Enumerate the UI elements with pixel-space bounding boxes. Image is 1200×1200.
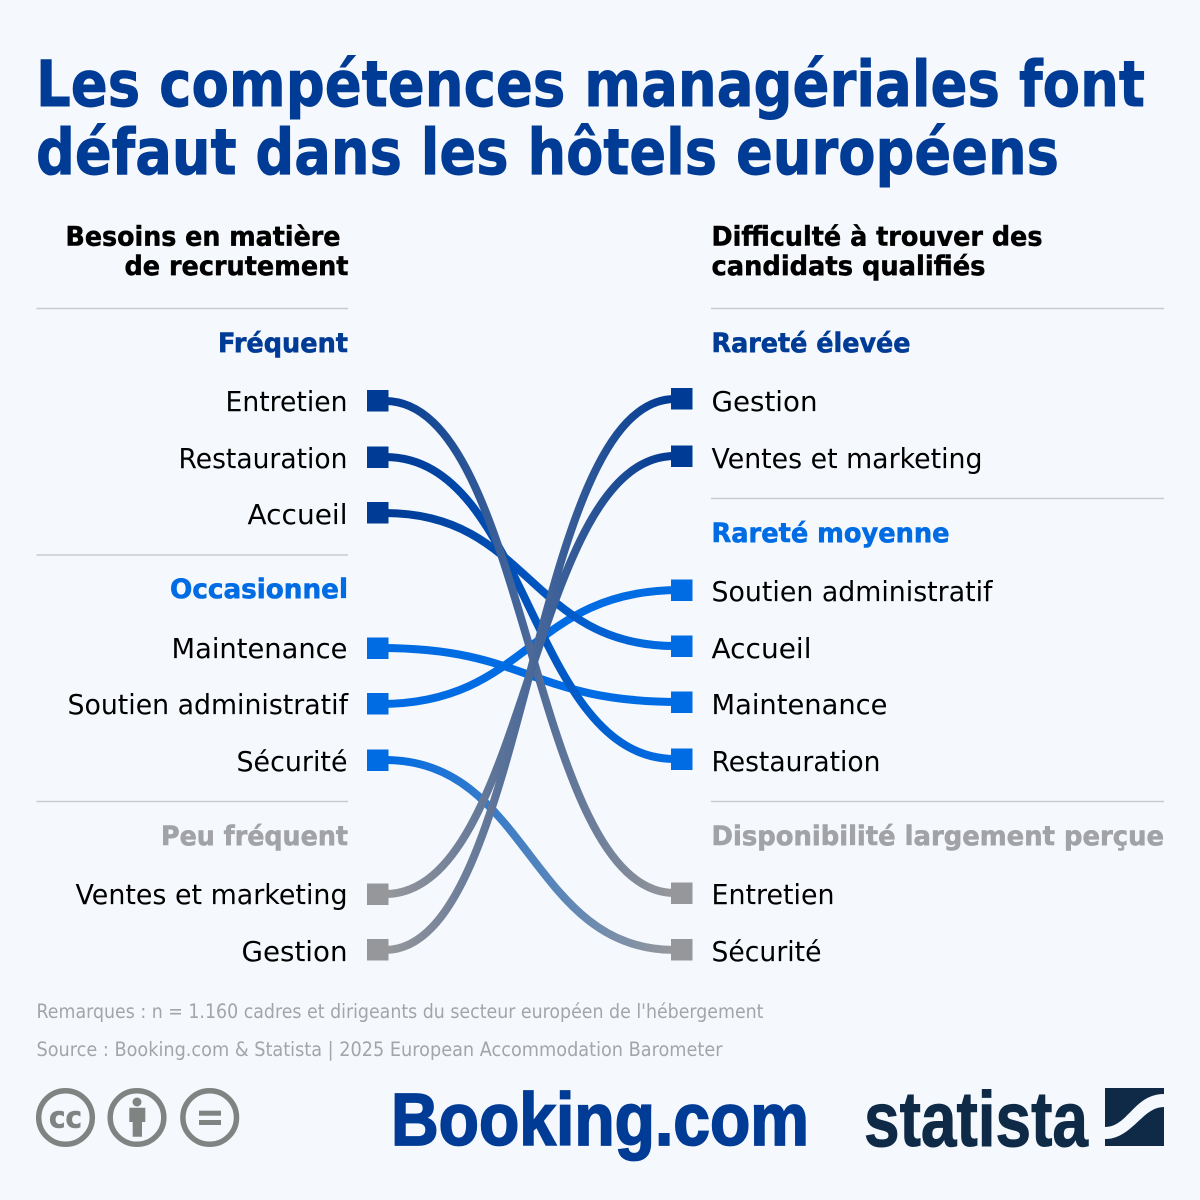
category: Occasionnel: Occasionnel: [170, 574, 348, 605]
label: Entretien: Entretien: [712, 879, 834, 911]
category: Rareté moyenne: Rareté moyenne: [712, 518, 950, 549]
right endpoint markers: [671, 388, 692, 960]
label: Gestion: Gestion: [712, 386, 818, 418]
label: Sécurité: Sécurité: [236, 746, 348, 778]
right column heading: candidats qualifiés: [712, 251, 986, 282]
panel: left column labels: [68, 328, 349, 968]
connector: Soutien administratif: [380, 590, 680, 704]
icon: creative commons: cc: [49, 1100, 82, 1134]
title: défaut dans les hôtels européens: [36, 116, 1059, 189]
left column heading: de recrutement: [124, 251, 349, 282]
left column heading: Besoins en matière: [66, 222, 340, 252]
title: [36, 48, 1145, 189]
label: Entretien: Entretien: [226, 386, 348, 418]
right column heading: [712, 222, 1042, 282]
right column heading: Difficulté à trouver des: [712, 222, 1042, 252]
logo: Statista wordmark: statista: [864, 1075, 1088, 1163]
label: Accueil: Accueil: [712, 633, 812, 665]
icon: creative commons: [39, 1091, 92, 1144]
connector: Gestion: [385, 399, 675, 950]
category: Rareté élevée: Rareté élevée: [712, 328, 910, 359]
label: Restauration: Restauration: [178, 443, 348, 475]
icon: attribution: [110, 1091, 164, 1144]
label: Restauration: Restauration: [712, 746, 880, 778]
label: Ventes et marketing: Ventes et marketing: [76, 879, 348, 911]
label: Sécurité: Sécurité: [712, 936, 822, 968]
connector: Sécurité: [385, 760, 675, 950]
label: Ventes et marketing: Ventes et marketing: [712, 443, 982, 475]
label: Maintenance: Maintenance: [172, 633, 348, 665]
left column heading: [66, 222, 349, 282]
category: Disponibilité largement perçue: Disponibilité largement perçue: [712, 821, 1164, 852]
connector: Accueil: [385, 513, 675, 646]
icon: no derivatives: [183, 1091, 236, 1144]
slope chart connectors: [380, 399, 680, 950]
connector: Entretien: [385, 401, 675, 893]
connector: Maintenance: [380, 648, 680, 702]
logo: Statista icon: [1105, 1088, 1164, 1146]
left endpoint markers: [367, 390, 388, 960]
label: Soutien administratif: Soutien administratif: [712, 576, 994, 608]
category: Fréquent: Fréquent: [218, 328, 348, 359]
label: Accueil: Accueil: [248, 499, 348, 531]
connector: Ventes et marketing: [385, 456, 675, 894]
label: Maintenance: Maintenance: [712, 689, 888, 721]
label: Gestion: Gestion: [242, 936, 348, 968]
notes: Remarques : n = 1.160 cadres et dirigeants du secteur européen de l'hébergement: [36, 1000, 764, 1023]
connector: Restauration: [385, 457, 675, 759]
category: Peu fréquent: Peu fréquent: [161, 821, 348, 852]
label: Soutien administratif: Soutien administratif: [68, 689, 349, 721]
source: Source : Booking.com & Statista | 2025 European Accommodation Barometer: [36, 1038, 723, 1061]
logo: Booking.com: Booking.com: [391, 1078, 809, 1161]
panel: right column labels: [712, 328, 1164, 968]
